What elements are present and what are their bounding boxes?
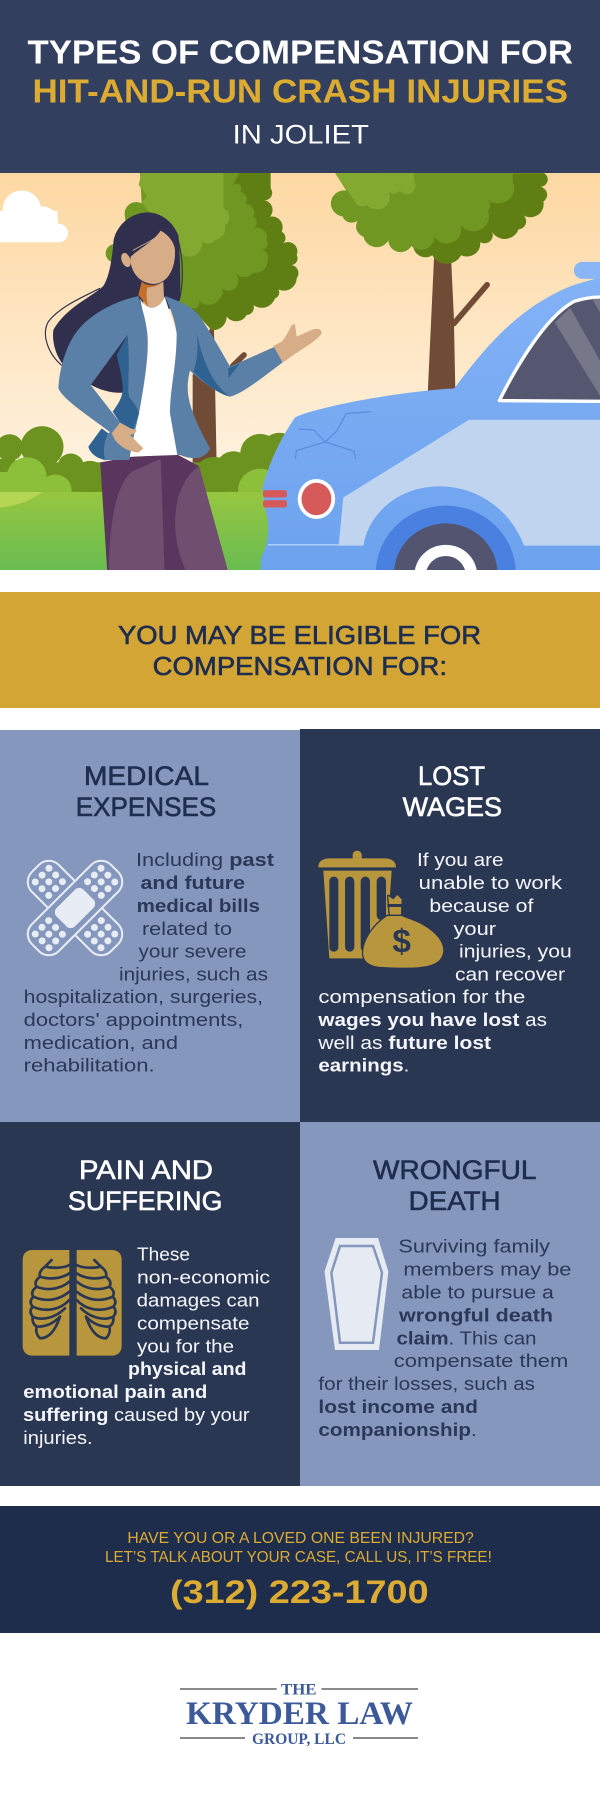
- tree right: [331, 173, 548, 392]
- logo: GROUP, LLC: [252, 1731, 346, 1748]
- text: pain and suffering: damages can: [137, 1290, 260, 1310]
- logo: THE: [281, 1682, 316, 1699]
- text: medical expenses: injuries, such as: [119, 964, 268, 984]
- woman: [45, 212, 322, 570]
- heading: lost wages: WAGES: [403, 792, 502, 822]
- text: medical expenses: doctors' appointments,: [24, 1010, 243, 1030]
- bushes and grass: [0, 426, 298, 570]
- heading: wrongful death: [373, 1155, 536, 1216]
- heading: pain and suffering: [68, 1155, 222, 1216]
- text: wrongful death: members may be: [403, 1260, 571, 1280]
- text: wrongful death: compensate them: [394, 1351, 568, 1371]
- text: medical expenses: [24, 850, 274, 1076]
- heading: pain and suffering: SUFFERING: [68, 1186, 222, 1216]
- banner heading: COMPENSATION FOR:: [153, 653, 447, 681]
- title line 3: IN JOLIET: [233, 120, 369, 150]
- header banner: [0, 0, 600, 173]
- text: pain and suffering: compensate: [137, 1313, 250, 1333]
- text: wrongful death: able to pursue a: [401, 1282, 555, 1302]
- panel: pain and suffering: [0, 1122, 300, 1486]
- text: lost wages: [317, 850, 572, 1076]
- car: [261, 262, 600, 641]
- logo: [180, 1682, 418, 1748]
- callout text: [105, 1530, 492, 1566]
- text: lost wages: injuries, you: [459, 942, 572, 962]
- text: pain and suffering: you for the: [137, 1336, 234, 1356]
- icon: trash can and money bag: [318, 851, 443, 968]
- text: medical expenses: related to: [142, 919, 232, 939]
- text: pain and suffering: suffering caused by your: [23, 1405, 250, 1425]
- text: medical expenses: rehabilitation.: [24, 1056, 155, 1076]
- text: lost wages: unable to work: [419, 873, 563, 893]
- text: pain and suffering: physical and: [128, 1359, 246, 1379]
- text: lost wages: compensation for the: [318, 987, 525, 1007]
- heading: lost wages: [403, 761, 502, 822]
- title line 1: TYPES OF COMPENSATION FOR: [28, 34, 573, 71]
- panel: lost wages: [300, 729, 600, 1122]
- text: wrongful death: lost income and: [318, 1397, 478, 1417]
- section banner: [0, 592, 600, 708]
- banner heading: [118, 622, 481, 681]
- text: pain and suffering: These: [137, 1245, 190, 1265]
- heading: pain and suffering: PAIN AND: [79, 1155, 213, 1185]
- text: wrongful death: wrongful death: [398, 1305, 553, 1325]
- heading: lost wages: LOST: [418, 761, 485, 791]
- callout text: HAVE YOU OR A LOVED ONE BEEN INJURED?: [127, 1530, 474, 1547]
- illustration: woman beside a damaged car: [0, 173, 600, 570]
- heading: medical expenses: MEDICAL: [84, 761, 209, 791]
- banner heading: YOU MAY BE ELIGIBLE FOR: [118, 622, 481, 650]
- text: pain and suffering: injuries.: [23, 1428, 93, 1448]
- heading: wrongful death: WRONGFUL: [373, 1155, 536, 1185]
- tree left: [106, 173, 298, 467]
- heading: medical expenses: EXPENSES: [76, 792, 216, 822]
- title line 2: HIT-AND-RUN CRASH INJURIES: [32, 73, 568, 110]
- text: medical expenses: hospitalization, surgeries,: [24, 987, 263, 1007]
- text: medical expenses: medication, and: [24, 1033, 178, 1053]
- text: medical expenses: medical bills: [137, 896, 260, 916]
- text: lost wages: your: [454, 919, 496, 939]
- text: pain and suffering: non-economic: [137, 1268, 270, 1288]
- call to action: [0, 1506, 600, 1633]
- text: pain and suffering: [23, 1245, 270, 1448]
- text: lost wages: wages you have lost as: [317, 1010, 547, 1030]
- icon: rib cage: [23, 1250, 122, 1356]
- logo: KRYDER LAW: [186, 1696, 413, 1732]
- heading: wrongful death: DEATH: [409, 1186, 501, 1216]
- text: wrongful death: for their losses, such as: [318, 1374, 535, 1394]
- icon: cloud: [0, 190, 68, 242]
- panel: medical expenses: [0, 730, 300, 1122]
- text: lost wages: If you are: [417, 850, 504, 870]
- heading: medical expenses: [76, 761, 216, 822]
- text: lost wages: because of: [429, 896, 535, 916]
- text: wrongful death: companionship .: [318, 1420, 477, 1440]
- phone number: (312) 223-1700: [170, 1574, 429, 1610]
- icon: dollar sign: $: [392, 924, 411, 961]
- text: lost wages: earnings .: [318, 1056, 409, 1076]
- text: lost wages: well as future lost: [317, 1033, 491, 1053]
- text: medical expenses: and future: [140, 873, 245, 893]
- text: medical expenses: your severe: [138, 942, 246, 962]
- text: pain and suffering: emotional pain and: [23, 1382, 207, 1402]
- text: medical expenses: Including past: [136, 850, 274, 870]
- icon: coffin: [324, 1238, 388, 1350]
- text: lost wages: can recover: [455, 964, 565, 984]
- text: wrongful death: Surviving family: [398, 1237, 550, 1257]
- text: wrongful death: [318, 1237, 571, 1440]
- panel: wrongful death: [300, 1122, 600, 1486]
- icon: crossed bandages: [22, 855, 128, 961]
- callout text: LET’S TALK ABOUT YOUR CASE, CALL US, IT’S FREE!: [105, 1549, 492, 1566]
- text: wrongful death: claim . This can: [396, 1328, 536, 1348]
